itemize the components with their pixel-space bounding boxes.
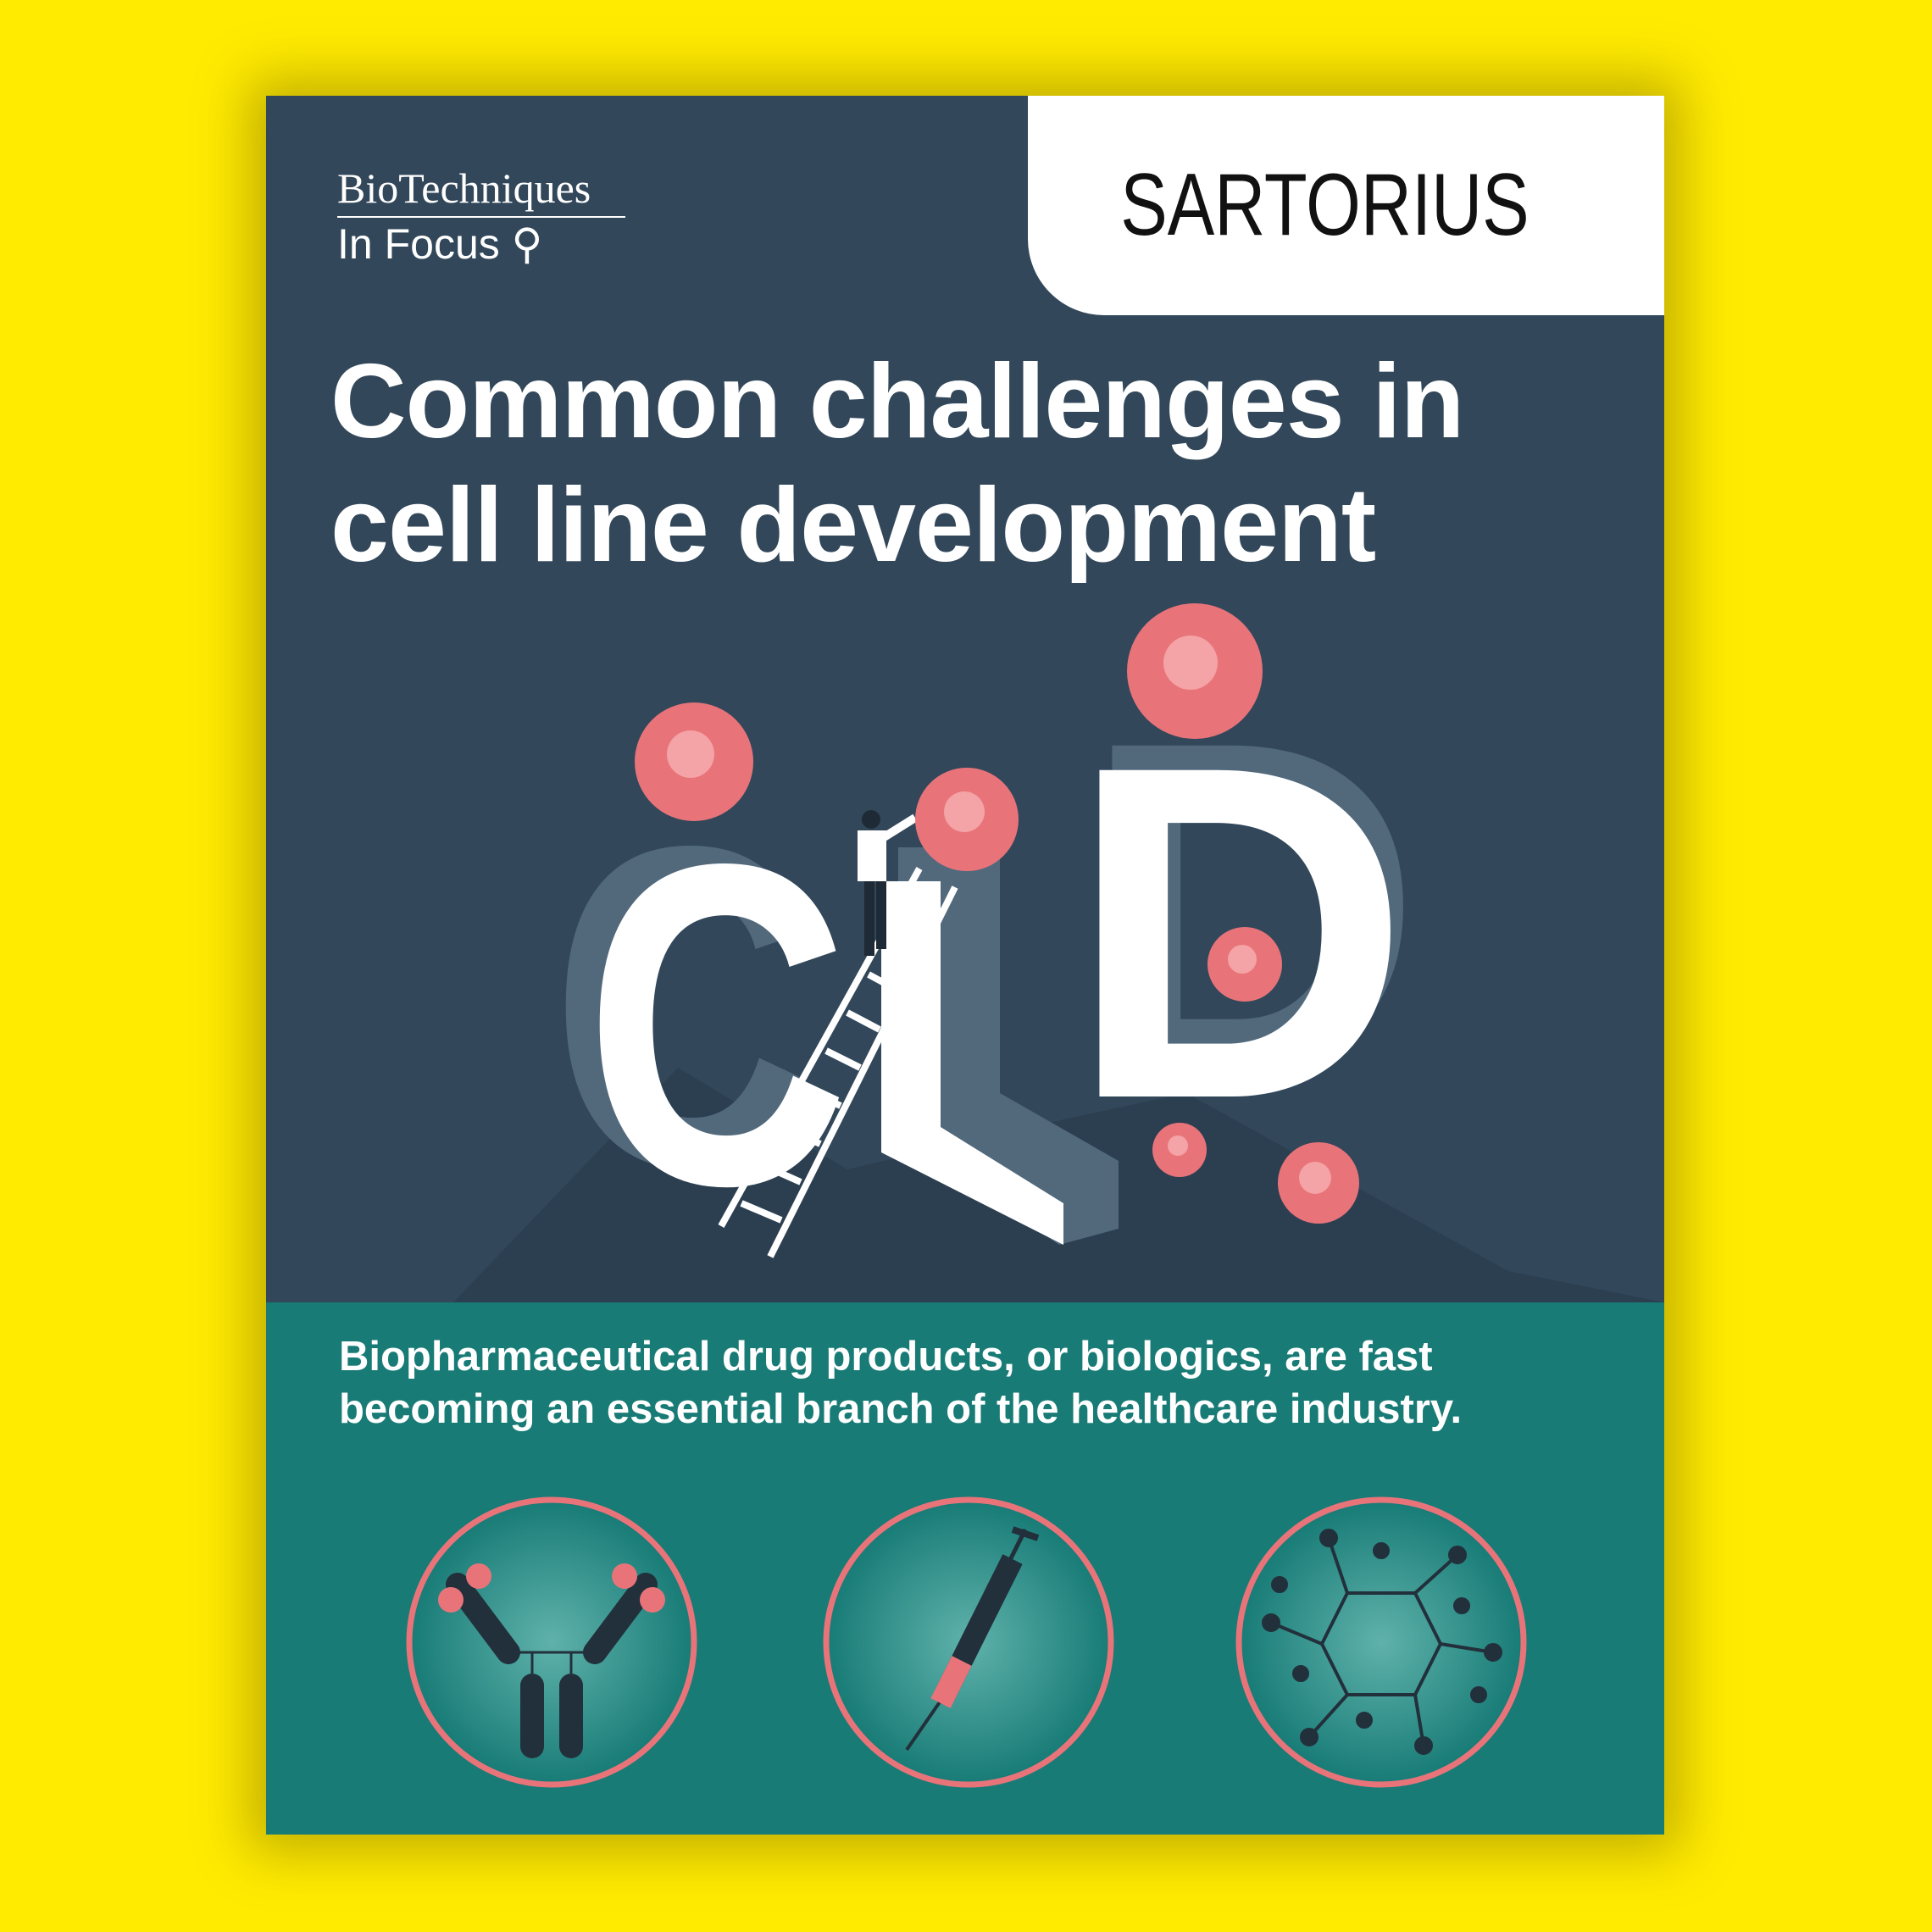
title: cell line development (330, 467, 1375, 584)
icon: molecule (1263, 1530, 1501, 1753)
logo box: Sartorius: SARTORIUS (1120, 156, 1530, 254)
ladder (721, 869, 955, 1257)
cells (635, 603, 1359, 1224)
logo: BioTechniques In Focus (337, 164, 625, 268)
illustration svg (266, 603, 1664, 1835)
logo: BioTechniques In Focus: BioTechniques (337, 164, 591, 212)
ground shadow (453, 1068, 1664, 1302)
letter C: C (551, 751, 815, 1263)
title (330, 343, 1463, 584)
icon: antibody (438, 1563, 665, 1758)
intro text: becoming an essential branch of the healthcare industry. (339, 1386, 1462, 1432)
letter D: D (1068, 667, 1410, 1197)
card (266, 96, 1664, 1835)
title: Common challenges in (330, 343, 1463, 460)
logo: BioTechniques In Focus: In Focus ⚲ (337, 220, 542, 268)
intro text (339, 1334, 1462, 1432)
letter D: D (1080, 642, 1423, 1173)
icon: syringe (907, 1530, 1038, 1750)
teal bottom section (266, 1302, 1664, 1835)
letter L (881, 847, 1119, 1245)
intro text: Biopharmaceutical drug products, or biologics, are fast (339, 1334, 1433, 1380)
logo box: Sartorius (1028, 96, 1664, 315)
person (858, 810, 915, 956)
letter C: C (585, 769, 849, 1280)
